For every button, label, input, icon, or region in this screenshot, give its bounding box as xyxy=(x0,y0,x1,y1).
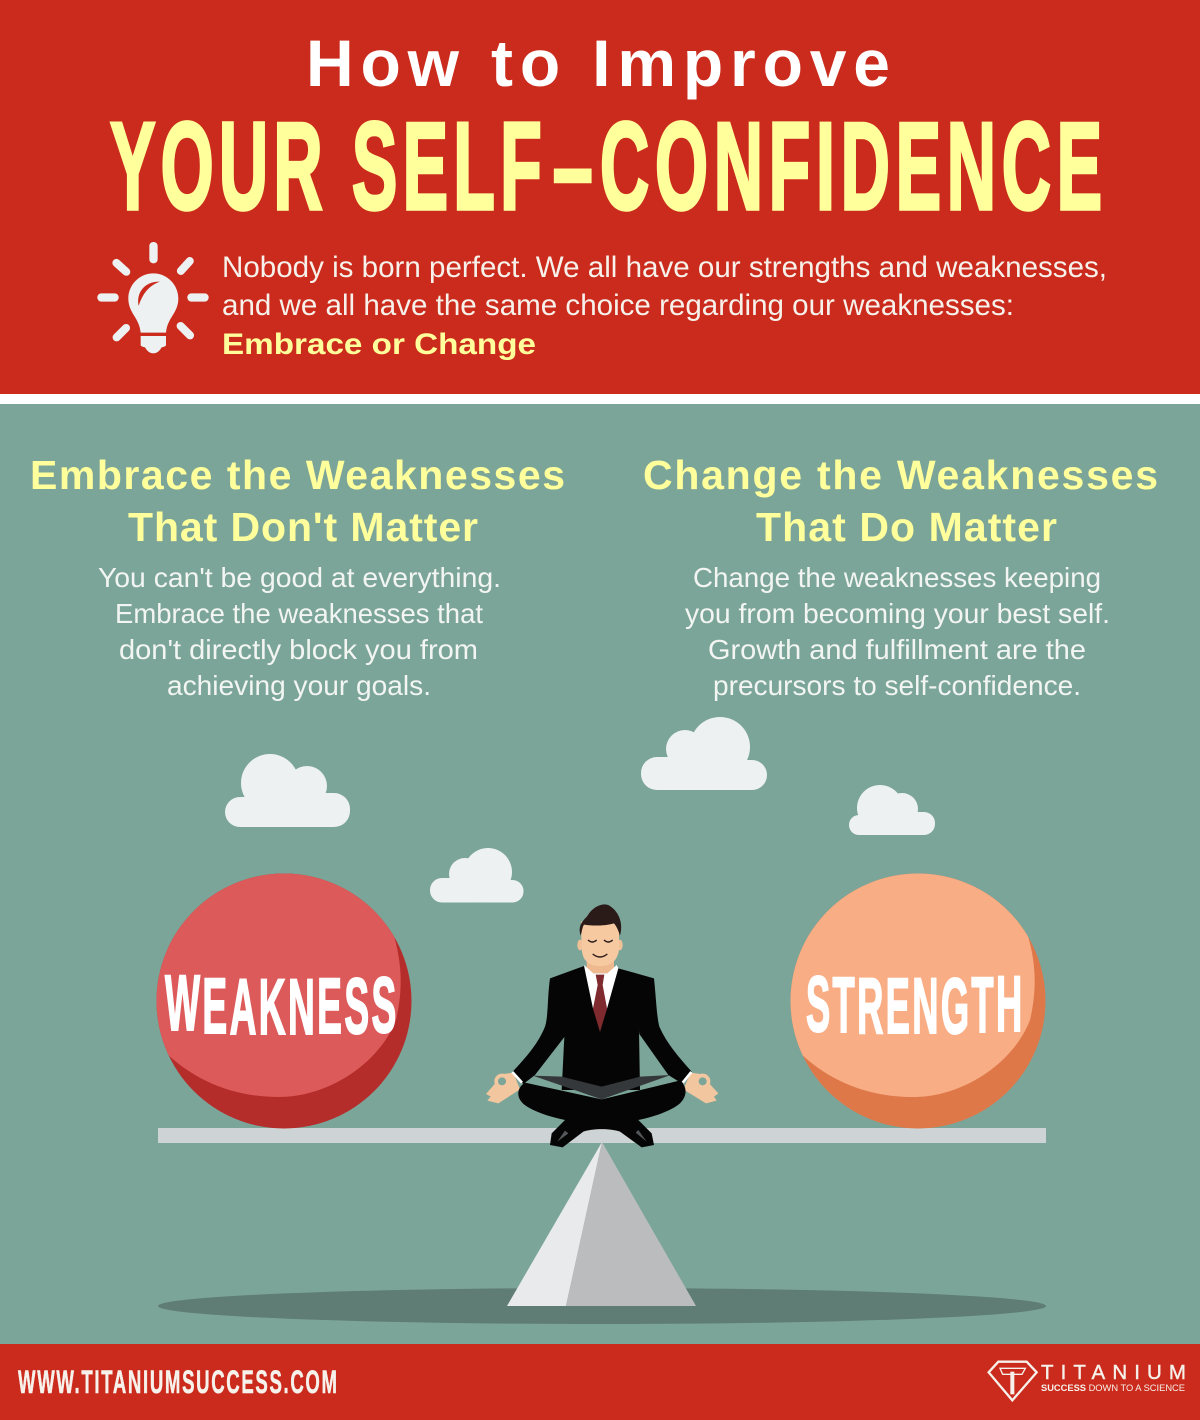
heading: change xyxy=(643,452,1158,550)
body text: embrace: achieving your goals. xyxy=(167,670,431,701)
website url: WWW.TITANIUMSUCCESS.COM xyxy=(18,1364,337,1400)
logo tagline: SUCCESS DOWN TO A SCIENCE xyxy=(1041,1383,1185,1394)
intro text: Embrace or Change xyxy=(222,328,536,361)
heading: embrace: Embrace the Weaknesses xyxy=(30,452,565,498)
heading: change: Change the Weaknesses xyxy=(643,452,1158,498)
logo name: TITANIUM xyxy=(1041,1361,1186,1384)
legs xyxy=(518,1081,686,1147)
heading: embrace xyxy=(30,452,565,550)
body text: change: precursors to self-confidence. xyxy=(713,670,1081,701)
main teal panel xyxy=(0,404,1200,1344)
title line 2: CONFIDENCE xyxy=(600,97,1102,236)
title line 2: YOUR SELF xyxy=(110,97,542,236)
cuffs xyxy=(512,1072,691,1083)
weakness ball xyxy=(156,874,412,1128)
body text: embrace: Embrace the weaknesses that xyxy=(115,598,483,629)
intro text xyxy=(222,251,1107,361)
footer panel xyxy=(0,1344,1200,1420)
body text: change: you from becoming your best self. xyxy=(685,598,1110,629)
strength label: STRENGTH xyxy=(806,960,1022,1051)
cloud 4 xyxy=(430,848,524,902)
left column: embrace xyxy=(30,452,565,701)
face xyxy=(581,922,619,966)
jacket xyxy=(513,966,692,1090)
hands xyxy=(486,1073,718,1103)
tie xyxy=(593,975,607,1032)
body text: change xyxy=(685,562,1110,701)
body text: embrace xyxy=(98,562,501,701)
title line 1: How to Improve xyxy=(306,26,890,100)
body text: change: Growth and fulfillment are the xyxy=(708,634,1086,665)
icon: diamond xyxy=(989,1362,1037,1400)
lap fold xyxy=(533,1075,671,1099)
body text: embrace: don't directly block you from xyxy=(119,634,478,665)
heading: change: That Do Matter xyxy=(756,504,1057,550)
heading: embrace: That Don't Matter xyxy=(128,504,478,550)
title line 2: - xyxy=(548,97,598,235)
hair xyxy=(580,904,621,936)
cloud 3 xyxy=(849,785,935,835)
titanium logo xyxy=(989,1361,1186,1400)
strength ball xyxy=(790,874,1046,1128)
icon: light bulb xyxy=(97,242,209,353)
meditating businessman xyxy=(486,904,718,1147)
pyramid fulcrum xyxy=(507,1142,696,1306)
ground shadow xyxy=(158,1288,1046,1324)
intro text: and we all have the same choice regarding our weaknesses: xyxy=(222,289,1014,322)
title line 2 xyxy=(110,97,1102,236)
body text: embrace: You can't be good at everything. xyxy=(98,562,501,593)
shirt xyxy=(584,965,619,1032)
seesaw beam xyxy=(158,1128,1046,1143)
cloud 2 xyxy=(641,717,767,790)
shoe highlights xyxy=(557,1131,568,1142)
ears and neck xyxy=(577,940,583,950)
body text: change: Change the weaknesses keeping xyxy=(693,562,1101,593)
weakness label: WEAKNESS xyxy=(165,960,396,1052)
intro text: Nobody is born perfect. We all have our strengths and weaknesses, xyxy=(222,251,1107,284)
facial features xyxy=(588,940,613,957)
cloud 1 xyxy=(225,754,350,827)
right column: change xyxy=(643,452,1158,701)
header panel xyxy=(0,0,1200,394)
